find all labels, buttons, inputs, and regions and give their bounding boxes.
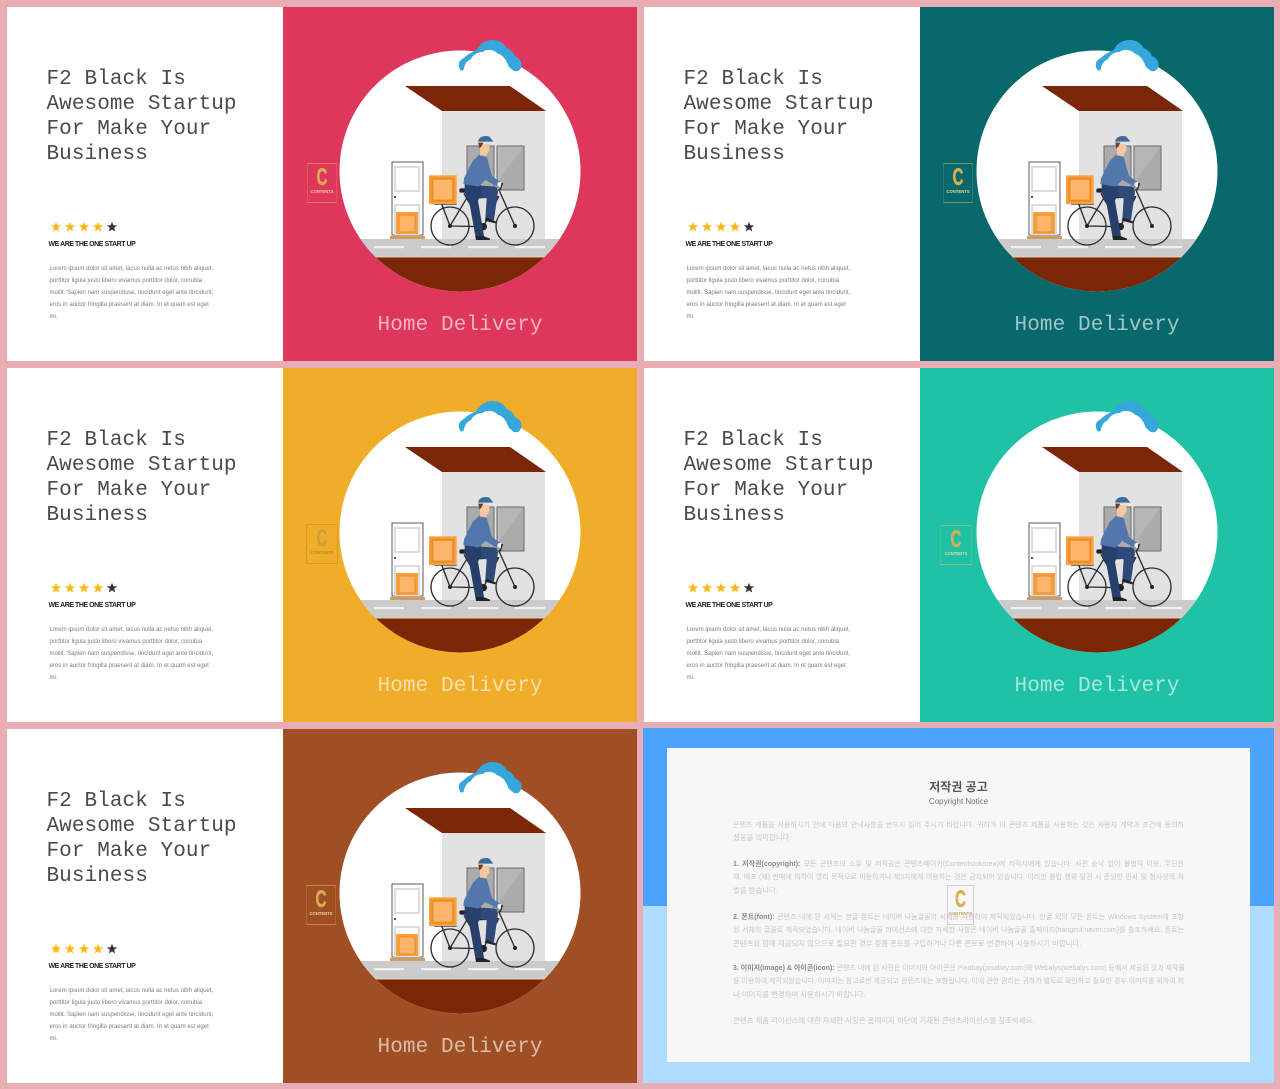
watermark logo: CONTENTS xyxy=(310,189,334,194)
watermark logo: C xyxy=(317,164,327,191)
caption: Home Delivery xyxy=(378,314,543,337)
watermark logo: C xyxy=(951,526,961,553)
body text: porttitor ligula justo libero vivamus porttitor dolor, conubia xyxy=(50,278,202,284)
door with parcel xyxy=(1027,523,1062,600)
panel: slide 4 green xyxy=(644,368,1274,722)
body text xyxy=(50,988,213,1042)
heading xyxy=(684,428,874,526)
body text: porttitor ligula justo libero vivamus porttitor dolor, conubia xyxy=(50,1000,202,1006)
door with parcel xyxy=(390,884,425,961)
panel: colored illustration area xyxy=(283,7,637,361)
watermark logo: C xyxy=(953,164,963,191)
icon: cloud xyxy=(1096,40,1159,77)
panel: copyright notice xyxy=(643,728,1274,1083)
heading: For Make Your xyxy=(684,118,848,140)
heading: Business xyxy=(684,142,785,166)
body text: Lorem ipsum dolor sit amet, lacus nulla ac netus nibh aliquet, xyxy=(50,988,213,994)
body text: eros in auctor fringilla praesent at diam. In et quam est eget xyxy=(50,1024,209,1030)
illustration: home delivery xyxy=(340,401,580,652)
panel: colored illustration area xyxy=(283,729,637,1083)
notice card xyxy=(667,748,1250,1062)
courier xyxy=(463,497,501,601)
watermark logo: CONTENTS xyxy=(949,911,972,916)
body text: mi. xyxy=(686,675,695,681)
icon: cloud xyxy=(1096,401,1159,438)
intro text end: 셨음을 의미합니다. xyxy=(733,833,792,842)
door with parcel xyxy=(1027,162,1062,239)
heading xyxy=(684,68,874,166)
clause 1 line 2: 재, 배포 (재) 판매에 의하여 영리 목적으로 이용하거나 제3자에게 이용하는 것은 금지되어 있습니다. 이러한 불법 행위 발견 시 준엄한 민사 및 형사상의 처 xyxy=(733,874,1184,881)
body text xyxy=(50,266,213,320)
courier xyxy=(463,136,501,240)
caption: Home Delivery xyxy=(378,1036,543,1059)
body text: mi. xyxy=(50,314,58,320)
icon: cloud xyxy=(459,762,522,799)
heading: copyright notice: 저작권 공고 xyxy=(929,780,988,794)
clause 3 line 3: 나 이미지를 변경하여 사용하시기 바랍니다. xyxy=(733,990,866,999)
illustration: home delivery xyxy=(340,40,580,292)
house xyxy=(405,808,546,961)
body text: mi. xyxy=(50,675,58,681)
heading: F2 Black Is xyxy=(684,428,823,452)
heading: Awesome Startup xyxy=(46,814,237,838)
bicycle with delivery box xyxy=(1066,536,1171,606)
circle with road xyxy=(967,50,1227,297)
bicycle with delivery box xyxy=(1066,175,1171,245)
heading: For Make Your xyxy=(46,118,211,140)
courier xyxy=(1100,136,1138,240)
body text: porttitor ligula justo libero vivamus porttitor dolor, conubia xyxy=(686,278,839,284)
watermark logo: CONTENTS xyxy=(310,550,334,555)
heading: F2 Black Is xyxy=(46,428,186,452)
watermark logo: CONTENTS xyxy=(946,189,970,194)
heading: Awesome Startup xyxy=(684,92,874,116)
subheading: WE ARE THE ONE START UP xyxy=(686,602,772,609)
clause 2 line 2: 된 서체의 글꼴로 제작되었습니다. 네이버 나눔글꼴 라이선스에 대한 자세한 사항은 네이버 나눔글꼴 홈페이지(hangeul.naver.com)를 참조하세요. 폰트는 xyxy=(733,927,1184,934)
heading xyxy=(46,428,237,526)
heading: F2 Black Is xyxy=(684,68,823,90)
subheading: Copyright Notice xyxy=(929,797,988,806)
heading: Business xyxy=(46,142,148,166)
panel: colored illustration area xyxy=(920,7,1274,361)
house xyxy=(405,447,546,600)
body text: Lorem ipsum dolor sit amet, lacus nulla ac netus nibh aliquet, xyxy=(50,627,213,633)
body text: Lorem ipsum dolor sit amet, lacus nulla ac netus nibh aliquet, xyxy=(686,627,850,633)
illustration: home delivery xyxy=(976,401,1218,652)
heading: For Make Your xyxy=(46,478,211,502)
caption: Home Delivery xyxy=(378,675,543,698)
heading xyxy=(46,68,237,166)
watermark logo xyxy=(947,885,974,925)
subheading: WE ARE THE ONE START UP xyxy=(48,241,135,248)
subheading: WE ARE THE ONE START UP xyxy=(48,963,135,970)
courier xyxy=(1100,497,1138,601)
body text: Lorem ipsum dolor sit amet, lacus nulla ac netus nibh aliquet, xyxy=(686,266,850,272)
body text: porttitor ligula justo libero vivamus porttitor dolor, conubia xyxy=(50,639,202,645)
bicycle with delivery box xyxy=(429,897,534,967)
door with parcel xyxy=(390,162,425,239)
body text: eros in auctor fringilla praesent at diam. In et quam est eget xyxy=(50,663,209,669)
panel: slide 3 yellow xyxy=(7,368,637,722)
body text xyxy=(686,626,850,681)
circle with road xyxy=(330,772,590,1019)
watermark logo xyxy=(943,163,973,203)
body text: eros in auctor fringilla praesent at diam. In et quam est eget xyxy=(686,302,846,308)
rating stars xyxy=(50,582,118,592)
watermark logo: C xyxy=(316,886,326,913)
courier xyxy=(463,858,501,962)
clause 1 line 1: 1. 저작권(copyright): 모든 콘텐츠의 소유 및 저작권은 콘텐츠메이커(Contentstokorea)에 저작자에게 있습니다. 사전 승낙 없이 불법적 이용, 무단전 xyxy=(733,861,1184,868)
heading: F2 Black Is xyxy=(46,68,186,90)
bicycle with delivery box xyxy=(429,175,534,245)
body text: mi. xyxy=(50,1036,58,1042)
clause 3 line 1: 3. 이미지(image) & 아이콘(icon): 콘텐츠 내에 된 사진은 이미지와 아이콘은 Pixabay(pixabay.com)와 Webalys(webalys.com) 등에서 제공된 것과 제작물 xyxy=(733,965,1184,972)
watermark logo: CONTENTS xyxy=(944,551,968,556)
watermark logo xyxy=(306,524,338,564)
body text: mollit. Sapien nam suspendisse, tincidunt eget ante tincidunt, xyxy=(50,290,213,296)
panel: colored illustration area xyxy=(920,368,1274,722)
heading xyxy=(46,790,237,888)
watermark logo: C xyxy=(955,886,966,913)
panel: slide 5 brown xyxy=(7,729,637,1083)
circle with road xyxy=(330,50,590,297)
icon: cloud xyxy=(459,40,522,77)
intro text: 콘텐츠 제품을 사용하시기 전에 다음의 안내사항을 반드시 읽어 주시기 바랍니다. 귀하가 이 콘텐츠 제품을 사용하는 것은 사용자 계약과 조건에 동의하 xyxy=(733,822,1184,829)
heading: F2 Black Is xyxy=(46,790,186,812)
watermark logo xyxy=(940,525,972,565)
watermark logo: C xyxy=(317,525,327,552)
body text: mollit. Sapien nam suspendisse, tincidunt eget ante tincidunt, xyxy=(50,651,213,657)
panel: slide 1 red xyxy=(7,7,637,361)
body text: Lorem ipsum dolor sit amet, lacus nulla ac netus nibh aliquet, xyxy=(50,266,213,272)
panel: slide 2 teal xyxy=(644,7,1274,361)
subheading: WE ARE THE ONE START UP xyxy=(686,241,772,248)
bicycle with delivery box xyxy=(429,536,534,606)
heading: Business xyxy=(46,504,148,526)
heading: Business xyxy=(684,504,785,526)
clause 2 line 3: 콘텐츠와 함께 제공되지 않으므로 필요한 경우 정품 폰트를 구입하거나 다른 폰트로 변경하여 사용하시기 바랍니다. xyxy=(733,939,1081,948)
body text: porttitor ligula justo libero vivamus porttitor dolor, conubia xyxy=(686,639,839,645)
heading: For Make Your xyxy=(46,840,211,862)
body text: eros in auctor fringilla praesent at diam. In et quam est eget xyxy=(50,302,209,308)
heading: Awesome Startup xyxy=(46,92,237,116)
rating stars xyxy=(50,944,118,954)
body text: mollit. Sapien nam suspendisse, tincidunt eget ante tincidunt, xyxy=(686,290,850,296)
clause 1 line 3: 벌을 받습니다. xyxy=(733,886,778,895)
illustration: home delivery xyxy=(976,40,1218,292)
door with parcel xyxy=(390,523,425,600)
house xyxy=(1042,86,1183,239)
closing note: 콘텐츠 제품 라이선스에 대한 자세한 사항은 홈페이지 하단에 기재된 콘텐츠라이선스를 참조하세요. xyxy=(733,1016,1034,1025)
clause 2 line 1: 2. 폰트(font): 콘텐츠 내에 된 서체는 한글 폰트는 네이버 나눔글꼴의 서체를 사용하여 제작되었습니다. 한글 외의 모든 폰트는 Windows System에 포함 xyxy=(733,914,1184,921)
body text: eros in auctor fringilla praesent at diam. In et quam est eget xyxy=(686,663,846,669)
rating stars xyxy=(50,222,118,232)
caption: Home Delivery xyxy=(1014,675,1180,698)
watermark logo: CONTENTS xyxy=(309,911,333,916)
body text xyxy=(50,626,213,681)
rating stars xyxy=(688,222,754,232)
illustration: home delivery xyxy=(340,762,580,1014)
body text xyxy=(686,266,850,320)
house xyxy=(1042,447,1183,600)
panel: colored illustration area xyxy=(283,368,637,722)
heading: For Make Your xyxy=(684,478,848,502)
body text: mollit. Sapien nam suspendisse, tincidunt eget ante tincidunt, xyxy=(686,651,850,657)
body text: mollit. Sapien nam suspendisse, tincidunt eget ante tincidunt, xyxy=(50,1012,213,1018)
circle with road xyxy=(330,412,590,658)
watermark logo xyxy=(306,885,336,925)
body text: mi. xyxy=(686,314,695,320)
circle with road xyxy=(967,412,1227,658)
heading: Awesome Startup xyxy=(46,454,237,476)
caption: Home Delivery xyxy=(1014,314,1180,337)
icon: cloud xyxy=(459,401,522,438)
subheading: WE ARE THE ONE START UP xyxy=(48,602,135,609)
house xyxy=(405,86,546,239)
heading: Awesome Startup xyxy=(684,454,874,476)
clause 3 line 2: 을 이용하여 제작되었습니다. 이미지는 참고로만 제공되고 콘텐츠에는 포함됩니다. 이에 관한 권리는 귀하가 별도로 확인하고 필요한 경우 이미지를 위하여 저 xyxy=(733,978,1184,985)
heading: Business xyxy=(46,864,148,888)
watermark logo xyxy=(307,163,337,203)
rating stars xyxy=(688,582,754,592)
